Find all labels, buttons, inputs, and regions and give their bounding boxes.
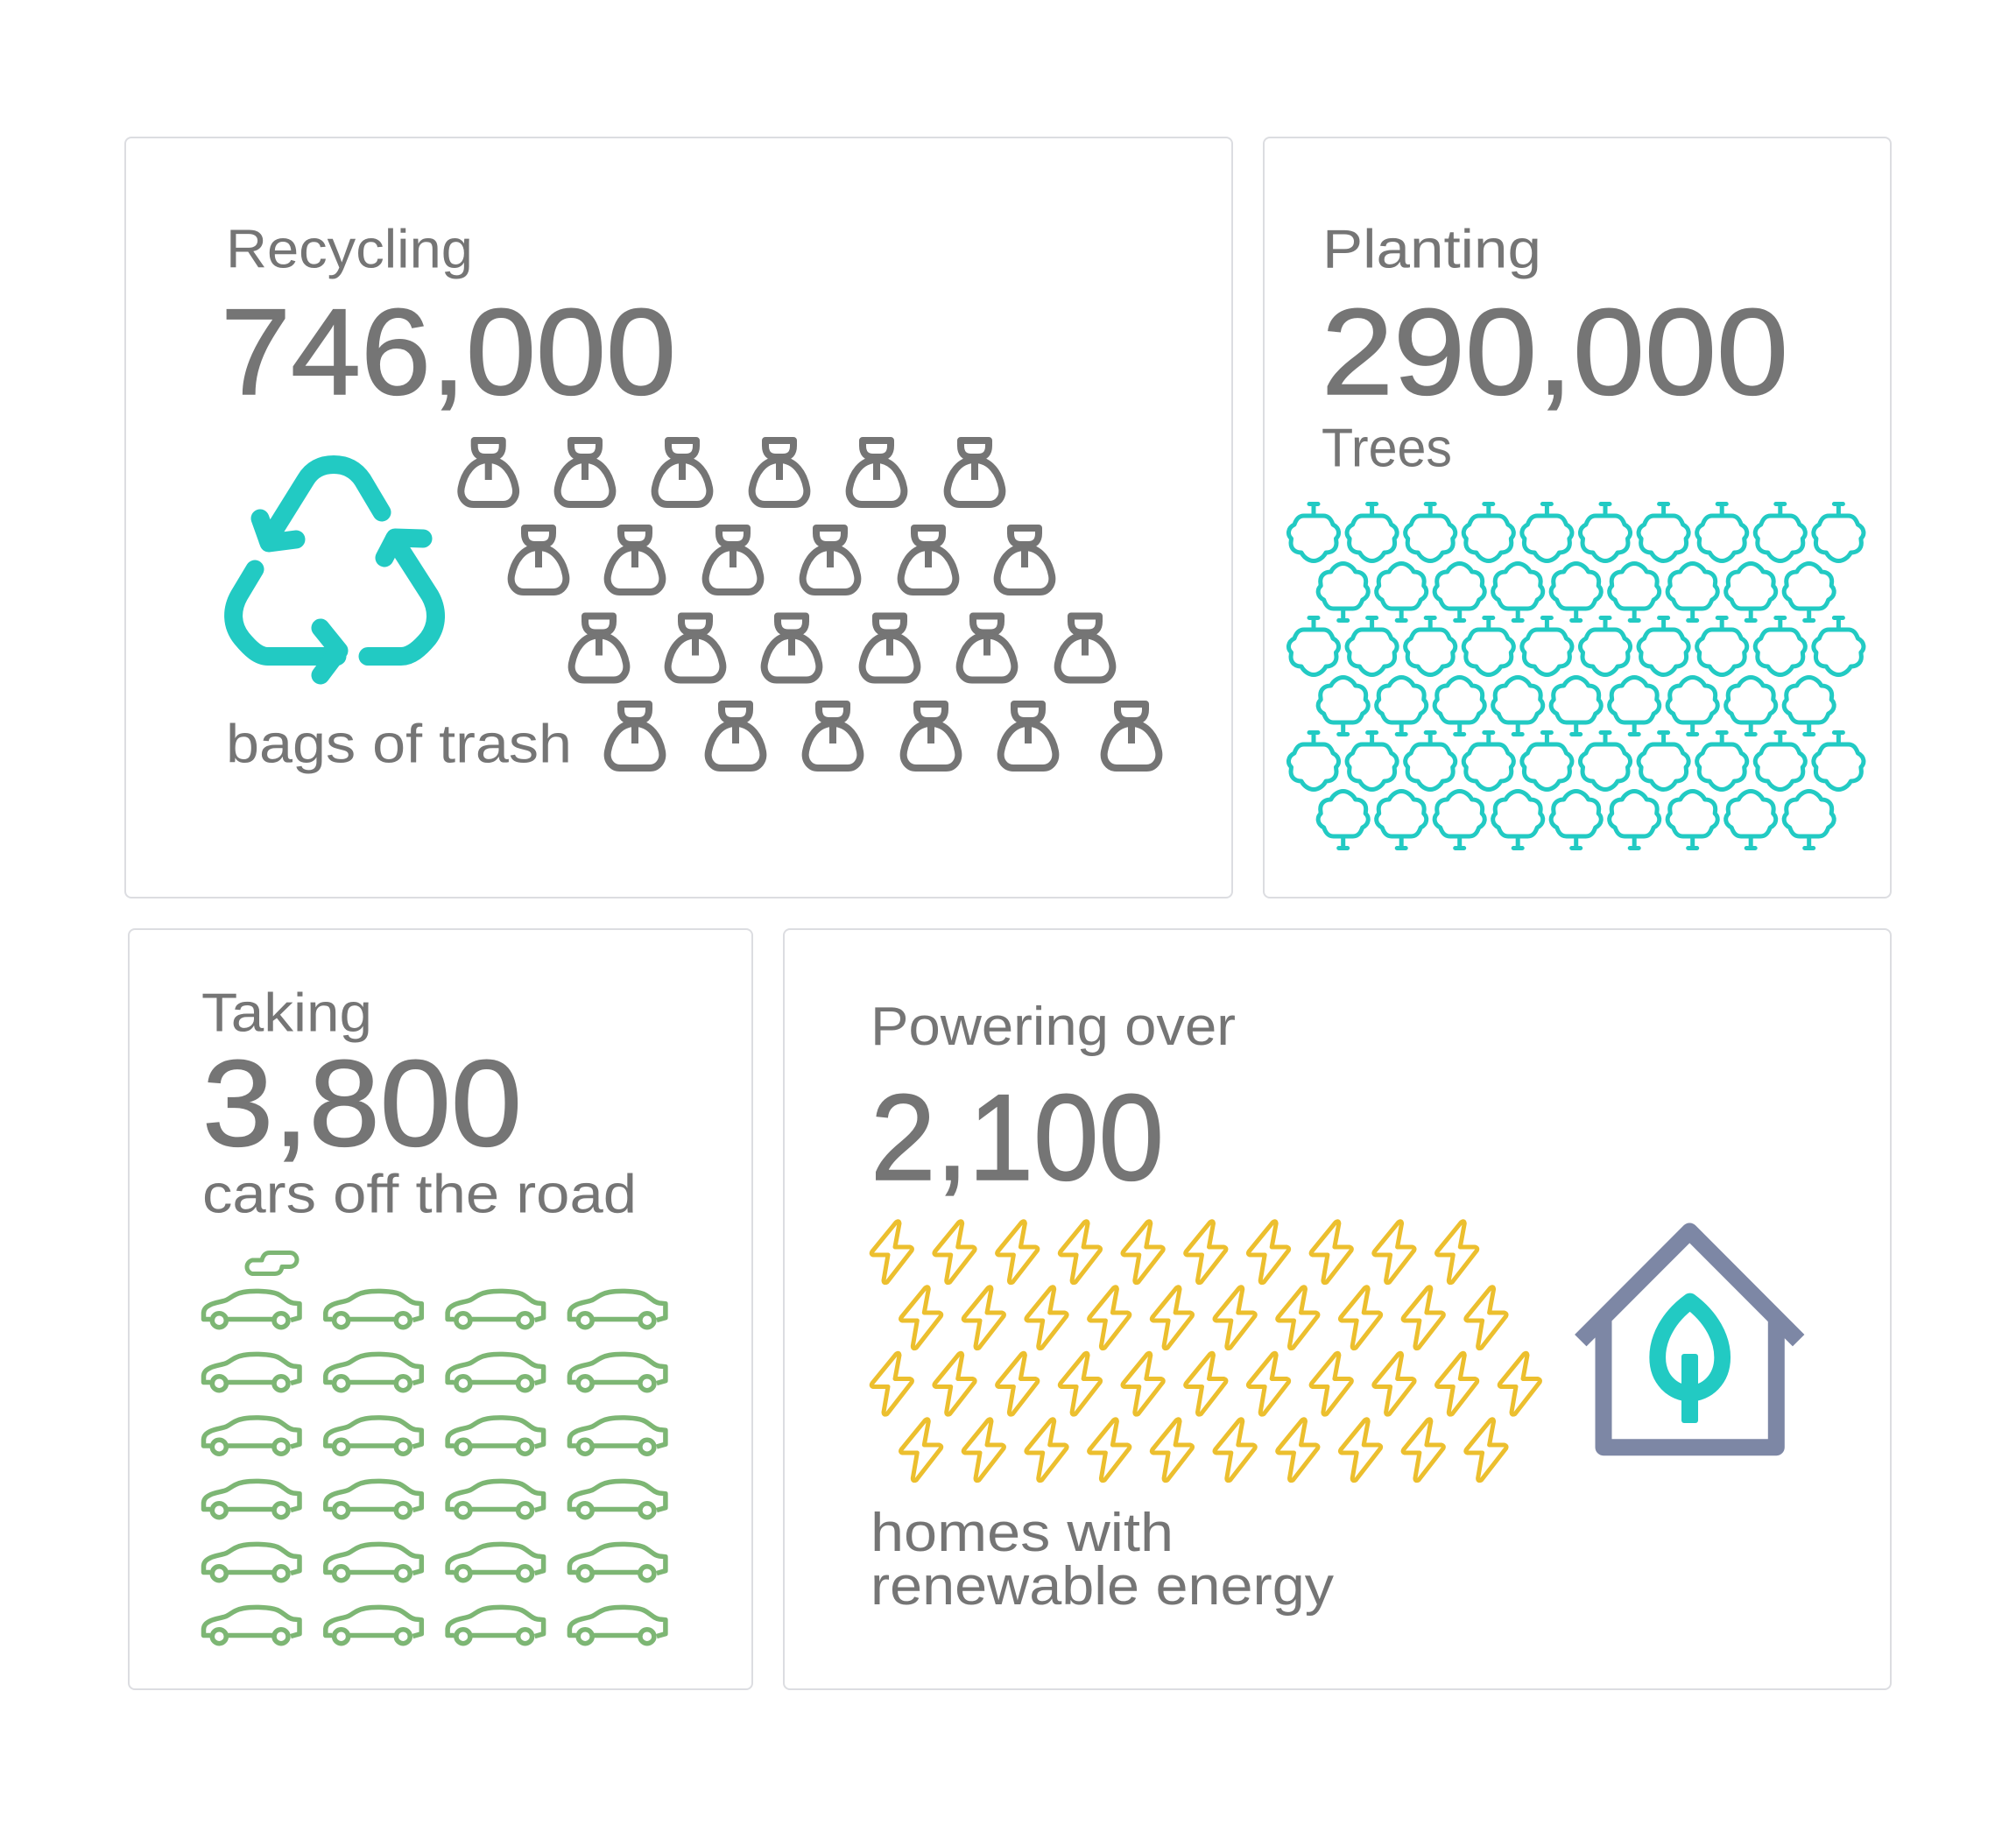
text: cars off the road: cars off the road (202, 1165, 637, 1224)
icon: house with leaf (1581, 1231, 1799, 1448)
text: homes with renewable energy (871, 1503, 1334, 1617)
text: homes with renewable energy: renewable energy (871, 1556, 1334, 1617)
number: 290,000: 290,000 (1322, 283, 1788, 420)
panel: renewable energy (784, 929, 1891, 1689)
panel: cars (129, 929, 752, 1689)
text: homes with renewable energy: homes with (871, 1503, 1174, 1563)
heading: recycling: Recycling (226, 219, 473, 280)
number: 746,000: 746,000 (221, 283, 676, 420)
panel: recycling (125, 137, 1232, 898)
icon grid: trash bags (461, 440, 1159, 768)
icon: exhaust cloud (247, 1252, 297, 1273)
number: 3,800: 3,800 (202, 1034, 522, 1172)
text: bags of trash: bags of trash (226, 715, 572, 774)
icon grid: lightning bolts (871, 1222, 1540, 1481)
panel: planting (1264, 137, 1891, 898)
text: trees: Trees (1322, 419, 1452, 478)
heading: taking: Taking (201, 983, 372, 1044)
number: 2,100: 2,100 (871, 1068, 1164, 1206)
icon grid: cars (203, 1291, 666, 1644)
icon grid: trees (1288, 504, 1864, 848)
heading: powering over: Powering over (871, 997, 1236, 1057)
icon: recycling arrows (234, 464, 436, 675)
heading: planting: Planting (1322, 219, 1541, 280)
